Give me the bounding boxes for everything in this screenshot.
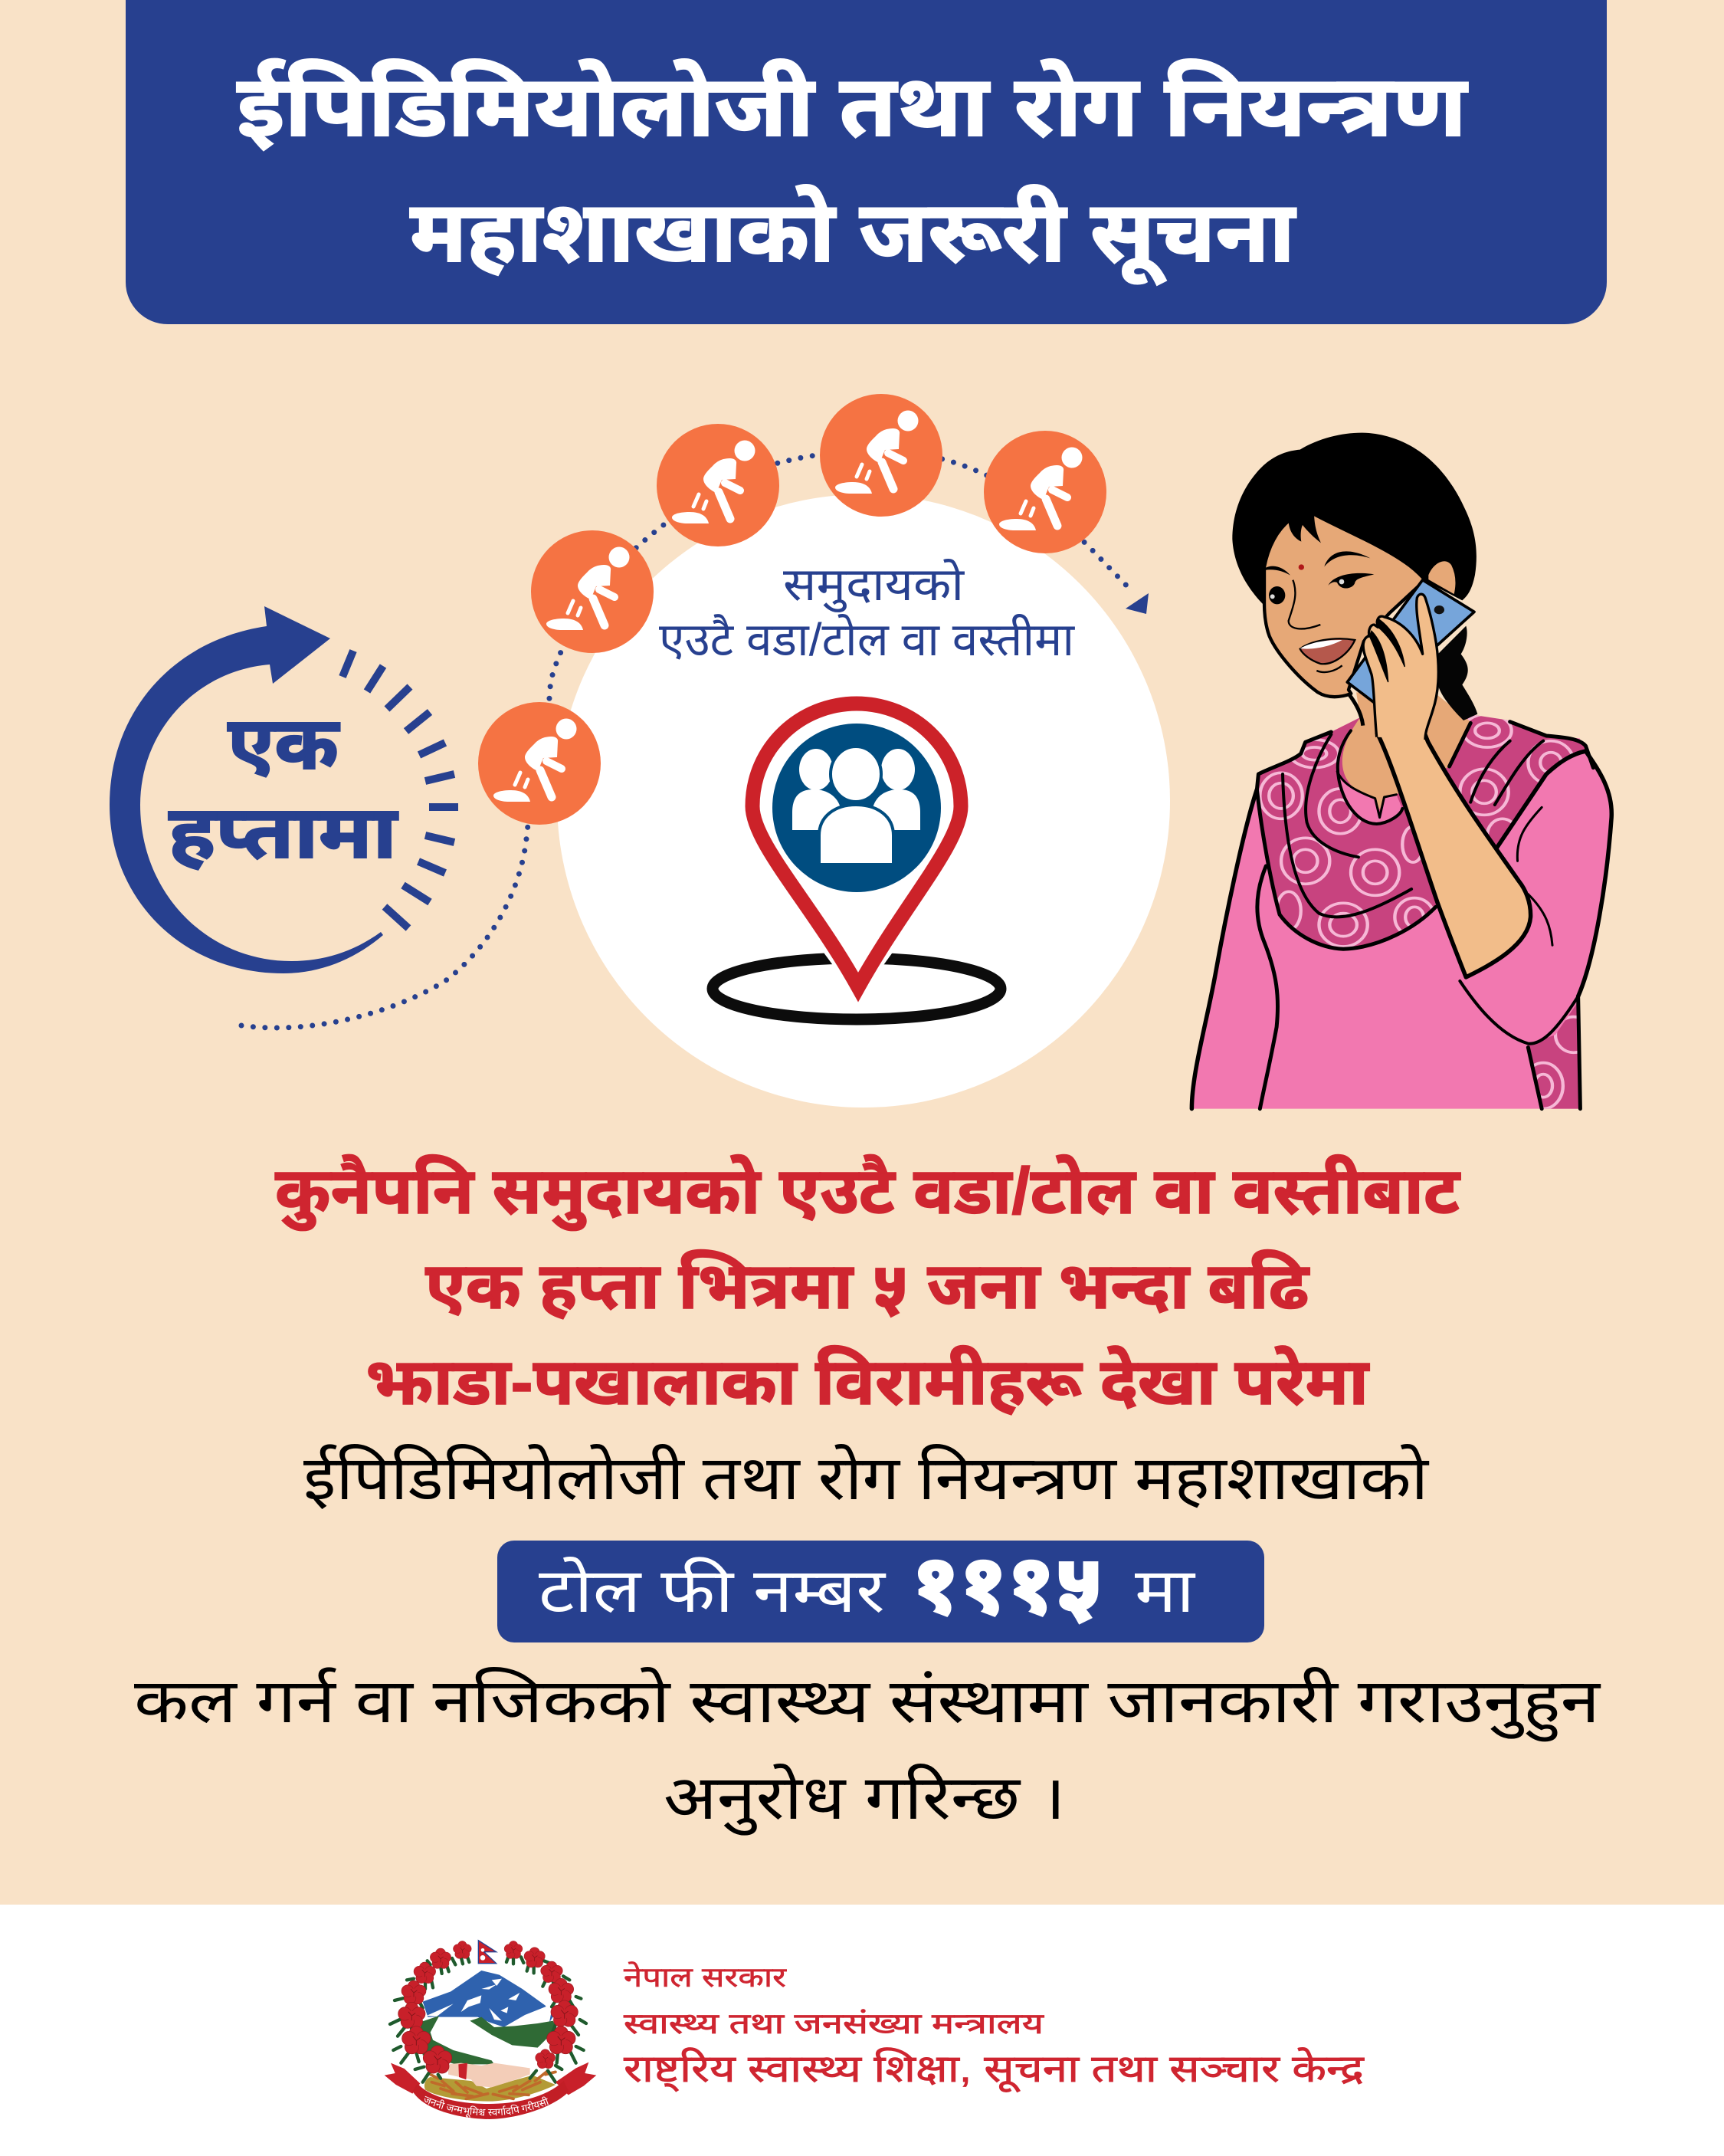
community white circle <box>557 494 1170 1108</box>
woman: hand <box>1363 594 1438 740</box>
label: one week <box>169 703 398 874</box>
community label: समुदायको <box>783 559 965 612</box>
icon: sick person 1 <box>478 702 601 825</box>
title banner <box>126 0 1607 324</box>
emblem: flag <box>478 1941 497 1964</box>
label: one week: हप्तामा <box>169 792 398 874</box>
icon: sick person 2 <box>531 530 654 653</box>
toll free pill: १११५ <box>912 1541 1103 1629</box>
title banner: महाशाखाको जरूरी सूचना <box>410 184 1296 286</box>
emblem: mountain <box>423 1971 553 2027</box>
woman: face <box>1264 514 1425 697</box>
emblem: gold ground <box>424 2076 556 2102</box>
location pin with people <box>713 704 1001 1019</box>
dotted route line <box>241 451 1132 1028</box>
government credit text: नेपाल सरकार <box>624 1961 788 1993</box>
community label: एउटै वडा/टोल वा वस्तीमा <box>659 614 1075 665</box>
alert text: झाडा-पखालाका विरामीहरू देखा परेमा <box>365 1345 1370 1419</box>
woman: eyes, nose and mouth <box>1264 551 1374 672</box>
title banner: ईपिडिमियोलोजी तथा रोग नियन्त्रण <box>237 58 1468 154</box>
illustration: woman on the phone <box>1190 433 1611 1109</box>
emblem: motto banner: जननी जन्मभूमिश्च स्वर्गादपि गरीयसी <box>424 2095 549 2118</box>
emblem of Nepal <box>385 1939 596 2119</box>
one week clock arrow <box>110 606 458 973</box>
toll free pill <box>497 1541 1264 1642</box>
emblem: snow <box>427 1979 553 2026</box>
woman: body and clothes <box>1190 692 1611 1109</box>
alert text: एक हप्ता भित्रमा ५ जना भन्दा बढि <box>425 1250 1310 1323</box>
emblem: handshake <box>448 2063 530 2087</box>
community label <box>659 559 1075 665</box>
woman: hair <box>1232 433 1477 605</box>
woman: head, phone and hand <box>1232 433 1477 740</box>
icon: sick person 4 <box>820 394 942 517</box>
alert text <box>275 1154 1460 1419</box>
woman: braid <box>1438 626 1477 720</box>
closing request text: अनुरोध गरिन्छ । <box>664 1764 1066 1836</box>
government credit text: राष्ट्रिय स्वास्थ्य शिक्षा, सूचना तथा सञ्चार केन्द्र <box>624 2047 1365 2093</box>
closing request text <box>134 1667 1601 1836</box>
emblem: wheat <box>431 2071 556 2099</box>
toll free pill: टोल फी नम्बर <box>539 1557 886 1625</box>
instruction line: ईपिडिमियोलोजी तथा रोग नियन्त्रण महाशाखाको <box>303 1444 1429 1512</box>
government credit text <box>624 1961 1365 2093</box>
emblem: motto banner <box>385 2062 596 2119</box>
emblem: wreath <box>390 1941 586 2082</box>
woman: phone <box>1347 580 1474 703</box>
closing request text: कल गर्न वा नजिकको स्वास्थ्य संस्थामा जानकारी गराउनुहुन <box>134 1667 1601 1742</box>
footer panel <box>0 1905 1724 2156</box>
government credit text: स्वास्थ्य तथा जनसंख्या मन्त्रालय <box>624 2008 1044 2040</box>
icon: sick person 5 <box>984 431 1106 553</box>
woman: ear <box>1427 560 1457 596</box>
icon: sick person 3 <box>657 424 779 546</box>
emblem: hills <box>420 2016 557 2064</box>
label: one week: एक <box>228 703 340 785</box>
alert text: कुनैपनि समुदायको एउटै वडा/टोल वा वस्तीबाट <box>275 1154 1460 1231</box>
woman: fringe <box>1288 511 1321 543</box>
route arrowhead <box>1126 593 1149 614</box>
toll free pill: मा <box>1135 1557 1195 1625</box>
